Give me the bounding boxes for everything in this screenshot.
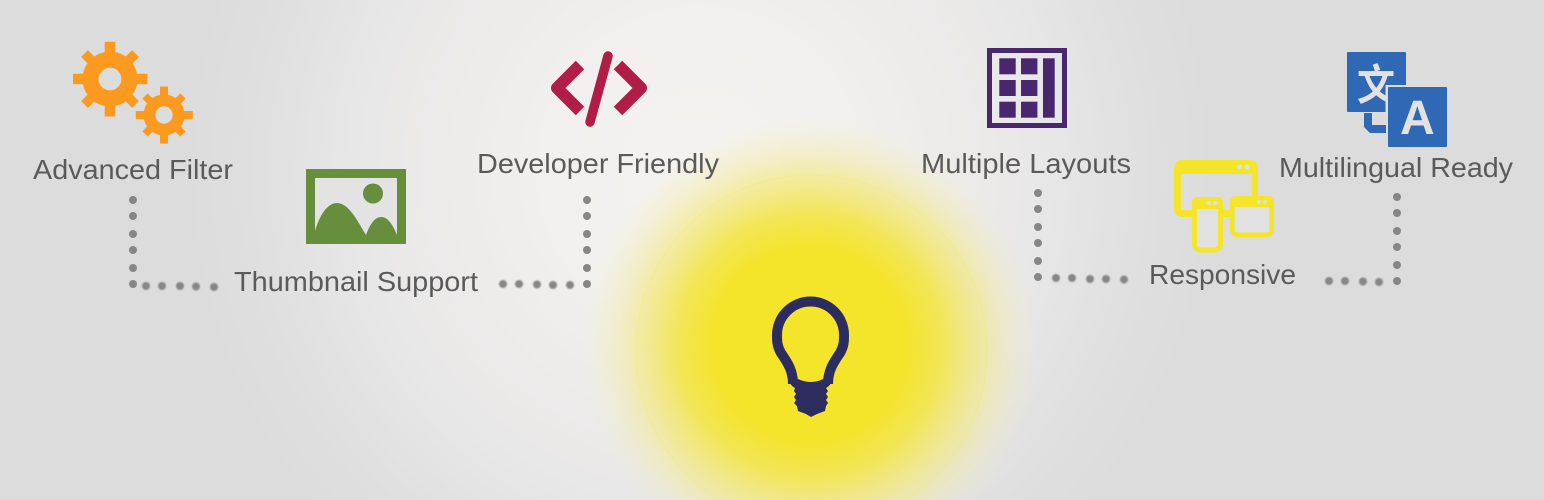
icon: translation: A — [1400, 92, 1435, 145]
icon: light bulb — [777, 302, 844, 417]
icon: code brackets — [557, 56, 641, 122]
icon: image thumbnail — [306, 169, 406, 244]
feature: Multiple Layouts — [921, 48, 1131, 284]
icon: translation — [1347, 50, 1447, 147]
dotted connector — [1325, 193, 1401, 286]
feature: Developer Friendly — [477, 56, 719, 289]
icon: gears — [73, 42, 193, 144]
icon: responsive devices — [1174, 160, 1274, 250]
feature: Responsive — [1149, 160, 1296, 290]
yellow light glow — [582, 117, 1038, 500]
icon: translation: 文 — [1357, 50, 1395, 113]
dotted connector — [1034, 189, 1128, 284]
feature: Thumbnail Support — [234, 169, 478, 297]
label: Developer Friendly: Developer Friendly — [477, 148, 719, 179]
label: Multilingual Ready: Multilingual Ready — [1279, 152, 1513, 183]
label: Advanced Filter: Advanced Filter — [33, 154, 233, 185]
feature: Multilingual Ready — [1279, 50, 1513, 286]
dotted connector — [129, 196, 218, 291]
feature: Advanced Filter — [33, 42, 233, 291]
label: Thumbnail Support: Thumbnail Support — [234, 266, 478, 297]
icon: grid layout — [987, 48, 1067, 128]
dotted connector — [499, 196, 591, 289]
label: Responsive: Responsive — [1149, 259, 1296, 290]
label: Multiple Layouts: Multiple Layouts — [921, 148, 1131, 179]
